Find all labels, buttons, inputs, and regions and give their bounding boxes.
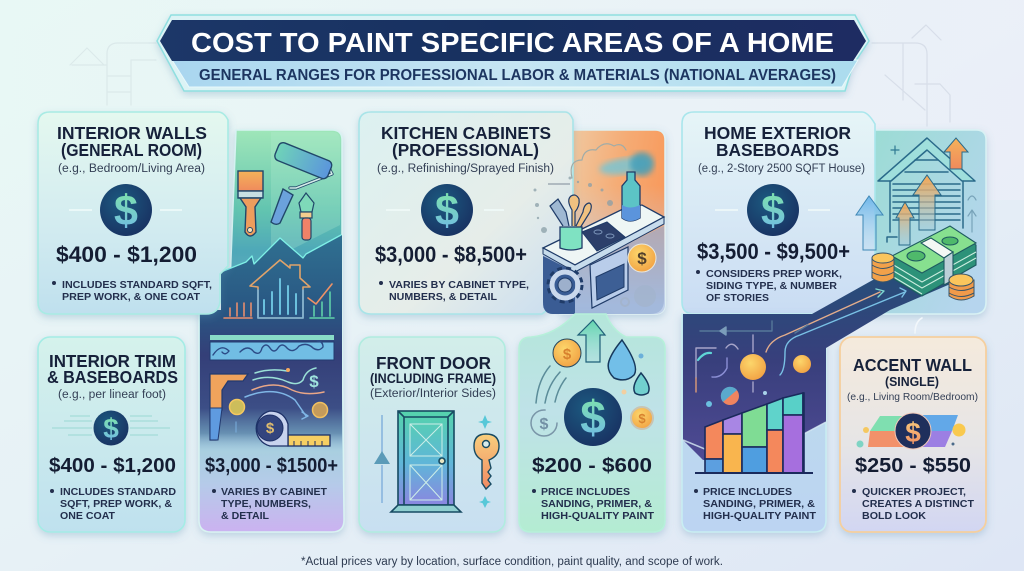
icon: large dollar coin: $	[580, 391, 606, 443]
example: (e.g., 2-Story 2500 SQFT House)	[698, 163, 865, 175]
icon: dollar coin: $	[114, 187, 138, 235]
light inner pane	[271, 132, 340, 260]
connector	[915, 318, 922, 333]
panel: interior walls	[38, 112, 228, 314]
card shape	[38, 112, 228, 314]
icon: utensils in cup	[550, 195, 591, 250]
icon: dollar coin	[69, 184, 182, 236]
bullets: ONE COAT	[60, 510, 116, 522]
icon: coins	[230, 400, 328, 418]
bullets: & DETAIL	[221, 510, 270, 522]
icon: paint drops	[608, 340, 649, 395]
icon: dollar coin: $	[761, 187, 785, 235]
heading: INTERIOR TRIM	[49, 351, 176, 371]
subtitle ribbon	[172, 60, 858, 87]
panel: home exterior	[682, 112, 875, 314]
icon: coins	[553, 339, 653, 429]
card shape	[38, 337, 185, 532]
card shape	[682, 314, 826, 532]
bullets: SIDING TYPE, & NUMBER	[706, 280, 837, 292]
icon: dollar coin	[386, 184, 504, 236]
price: $3,500 - $9,500+	[697, 239, 850, 264]
spray dots	[534, 176, 613, 233]
icon: sparkles	[478, 415, 492, 508]
bullets: BOLD LOOK	[862, 510, 926, 522]
bullets: VARIES BY CABINET TYPE,	[389, 279, 529, 291]
icon: paint swatch with dollar coin	[856, 413, 966, 449]
heading: FRONT DOOR	[376, 353, 491, 373]
dark ridge and lower dark field	[200, 235, 342, 450]
price: $200 - $600	[532, 455, 652, 477]
icon: dollar outline: $	[540, 416, 549, 433]
house	[878, 138, 975, 242]
panel: interior trim: & BASEBOARDS	[47, 367, 178, 387]
bullets	[50, 486, 176, 522]
card shape	[682, 112, 875, 314]
icon: spray can	[622, 172, 640, 221]
panel: front door: (INCLUDING FRAME)	[370, 371, 496, 386]
icon: paint brush	[238, 171, 263, 236]
bullets: SQFT, PREP WORK, &	[60, 498, 172, 510]
bullets: VARIES BY CABINET	[221, 486, 328, 498]
price: $250 - $550	[855, 455, 971, 477]
counter top	[543, 205, 664, 265]
kitchen illustration background	[560, 130, 665, 314]
subtitle: GENERAL RANGES FOR PROFESSIONAL LABOR & MATERIALS (NATIONAL AVERAGES)	[199, 67, 836, 84]
faded gear coin	[621, 285, 656, 307]
icon: coins: $	[638, 411, 646, 426]
card shape	[359, 112, 573, 314]
icon: house outline with bars	[224, 260, 334, 318]
stacked bar chart	[695, 393, 813, 473]
icon: dollar coin	[628, 244, 656, 272]
icon: door	[391, 411, 461, 512]
bullets: CONSIDERS PREP WORK,	[706, 268, 842, 280]
panel: paint drops and coins	[519, 314, 665, 532]
icon: large dollar coin	[564, 388, 622, 446]
icon: house with rising arrows	[856, 138, 976, 250]
icon: dollar sign accent: $	[309, 372, 319, 391]
icon: oven	[590, 247, 628, 308]
example: (e.g., Refinishing/Sprayed Finish)	[377, 163, 554, 175]
bullets: INCLUDES STANDARD	[60, 486, 176, 498]
example: (e.g., Living Room/Bedroom)	[847, 391, 978, 403]
bullets	[52, 279, 212, 303]
icon: dollar coin with lines	[52, 410, 170, 446]
title banner	[157, 15, 869, 91]
icon: small artist brush	[299, 193, 314, 240]
bullets	[852, 486, 975, 522]
heading: ACCENT WALL	[853, 355, 972, 375]
price: $3,000 - $8,500+	[375, 242, 527, 267]
icon: dollar coin: $	[637, 249, 647, 268]
example: (Exterior/Interior Sides)	[370, 388, 496, 400]
title: COST TO PAINT SPECIFIC AREAS OF A HOME	[191, 27, 834, 58]
panel: accent wall	[840, 318, 986, 532]
dark background	[683, 262, 955, 460]
icon: key	[474, 434, 499, 489]
bullets: HIGH-QUALITY PAINT	[541, 510, 655, 522]
footnote: *Actual prices vary by location, surface condition, paint quality, and scope of work.	[301, 556, 723, 568]
panel: kitchen cabinets: (PROFESSIONAL)	[392, 140, 539, 160]
panel: chart with dark ribbon	[682, 262, 955, 532]
bullets: NUMBERS, & DETAIL	[389, 291, 498, 303]
bullets	[212, 486, 328, 522]
bullets: TYPE, NUMBERS,	[221, 498, 311, 510]
bullets	[696, 268, 842, 304]
bullets: PREP WORK, & ONE COAT	[62, 291, 201, 303]
panel: interior trim	[38, 337, 185, 532]
icon: measuring tape	[256, 411, 330, 446]
heading: INTERIOR WALLS	[57, 123, 207, 143]
price: $400 - $1,200	[56, 242, 197, 267]
spray cloud	[571, 144, 626, 178]
counter body	[543, 226, 664, 314]
panel: front door	[359, 337, 505, 532]
column background	[199, 130, 344, 532]
icon: up arrow	[578, 320, 605, 362]
bullets	[532, 486, 655, 522]
icon: crown moulding band	[210, 335, 334, 360]
arrows	[944, 138, 968, 169]
icon: paint roller	[271, 141, 333, 224]
panel: home exterior: BASEBOARDS	[716, 140, 839, 160]
bullets: CREATES A DISTINCT	[862, 498, 975, 510]
bullets: OF STORIES	[706, 292, 769, 304]
panel: kitchen cabinets	[359, 112, 573, 314]
card shape	[840, 337, 986, 532]
bullets: QUICKER PROJECT,	[862, 486, 966, 498]
banner frame glow	[157, 15, 869, 91]
card shape	[519, 314, 665, 532]
icon: dollar coin with lines: $	[103, 413, 119, 444]
card shape	[359, 337, 505, 532]
icon: swoosh arrows	[531, 366, 566, 436]
icon: coins	[706, 354, 811, 407]
heading: HOME EXTERIOR	[704, 123, 851, 143]
bullets: PRICE INCLUDES	[541, 486, 630, 498]
icon: dollar coin: $	[435, 187, 459, 235]
blueprint sketch left	[70, 43, 156, 105]
bullets	[379, 279, 529, 303]
ribbon lines	[696, 288, 906, 392]
icon: measuring tape: $	[266, 420, 275, 437]
bullets: PRICE INCLUDES	[703, 486, 792, 498]
price: $3,000 - $1500+	[205, 455, 338, 477]
icon: coin stacks	[872, 253, 974, 300]
bullets	[694, 486, 817, 522]
blueprint sketch right	[872, 25, 950, 126]
icon: money stack	[892, 226, 976, 296]
icon: corner trim	[210, 374, 248, 440]
bullets: INCLUDES STANDARD SQFT,	[62, 279, 212, 291]
panel: interior walls: (GENERAL ROOM)	[61, 140, 202, 160]
icon: gear	[548, 268, 582, 302]
title ribbon	[160, 20, 866, 61]
icon: height arrow	[374, 415, 390, 503]
icon: dollar coin	[715, 184, 830, 236]
cooktop	[582, 222, 625, 251]
bullets: SANDING, PRIMER, &	[541, 498, 652, 510]
kitchen illustration	[534, 144, 664, 314]
panel: accent wall: (SINGLE)	[885, 374, 939, 389]
icon: money flow lines	[236, 368, 324, 432]
bullets: HIGH-QUALITY PAINT	[703, 510, 817, 522]
illustration panel: painting tools and trim column	[199, 130, 344, 532]
price: $400 - $1,200	[49, 455, 176, 477]
panel: exterior illustration	[870, 130, 986, 314]
bullets: SANDING, PRIMER, &	[703, 498, 815, 510]
example: (e.g., Bedroom/Living Area)	[58, 163, 205, 175]
icon: paint swatch with dollar coin: $	[905, 417, 921, 448]
icon: coins: $	[563, 346, 572, 363]
example: (e.g., per linear foot)	[58, 389, 166, 401]
heading: KITCHEN CABINETS	[381, 123, 551, 143]
